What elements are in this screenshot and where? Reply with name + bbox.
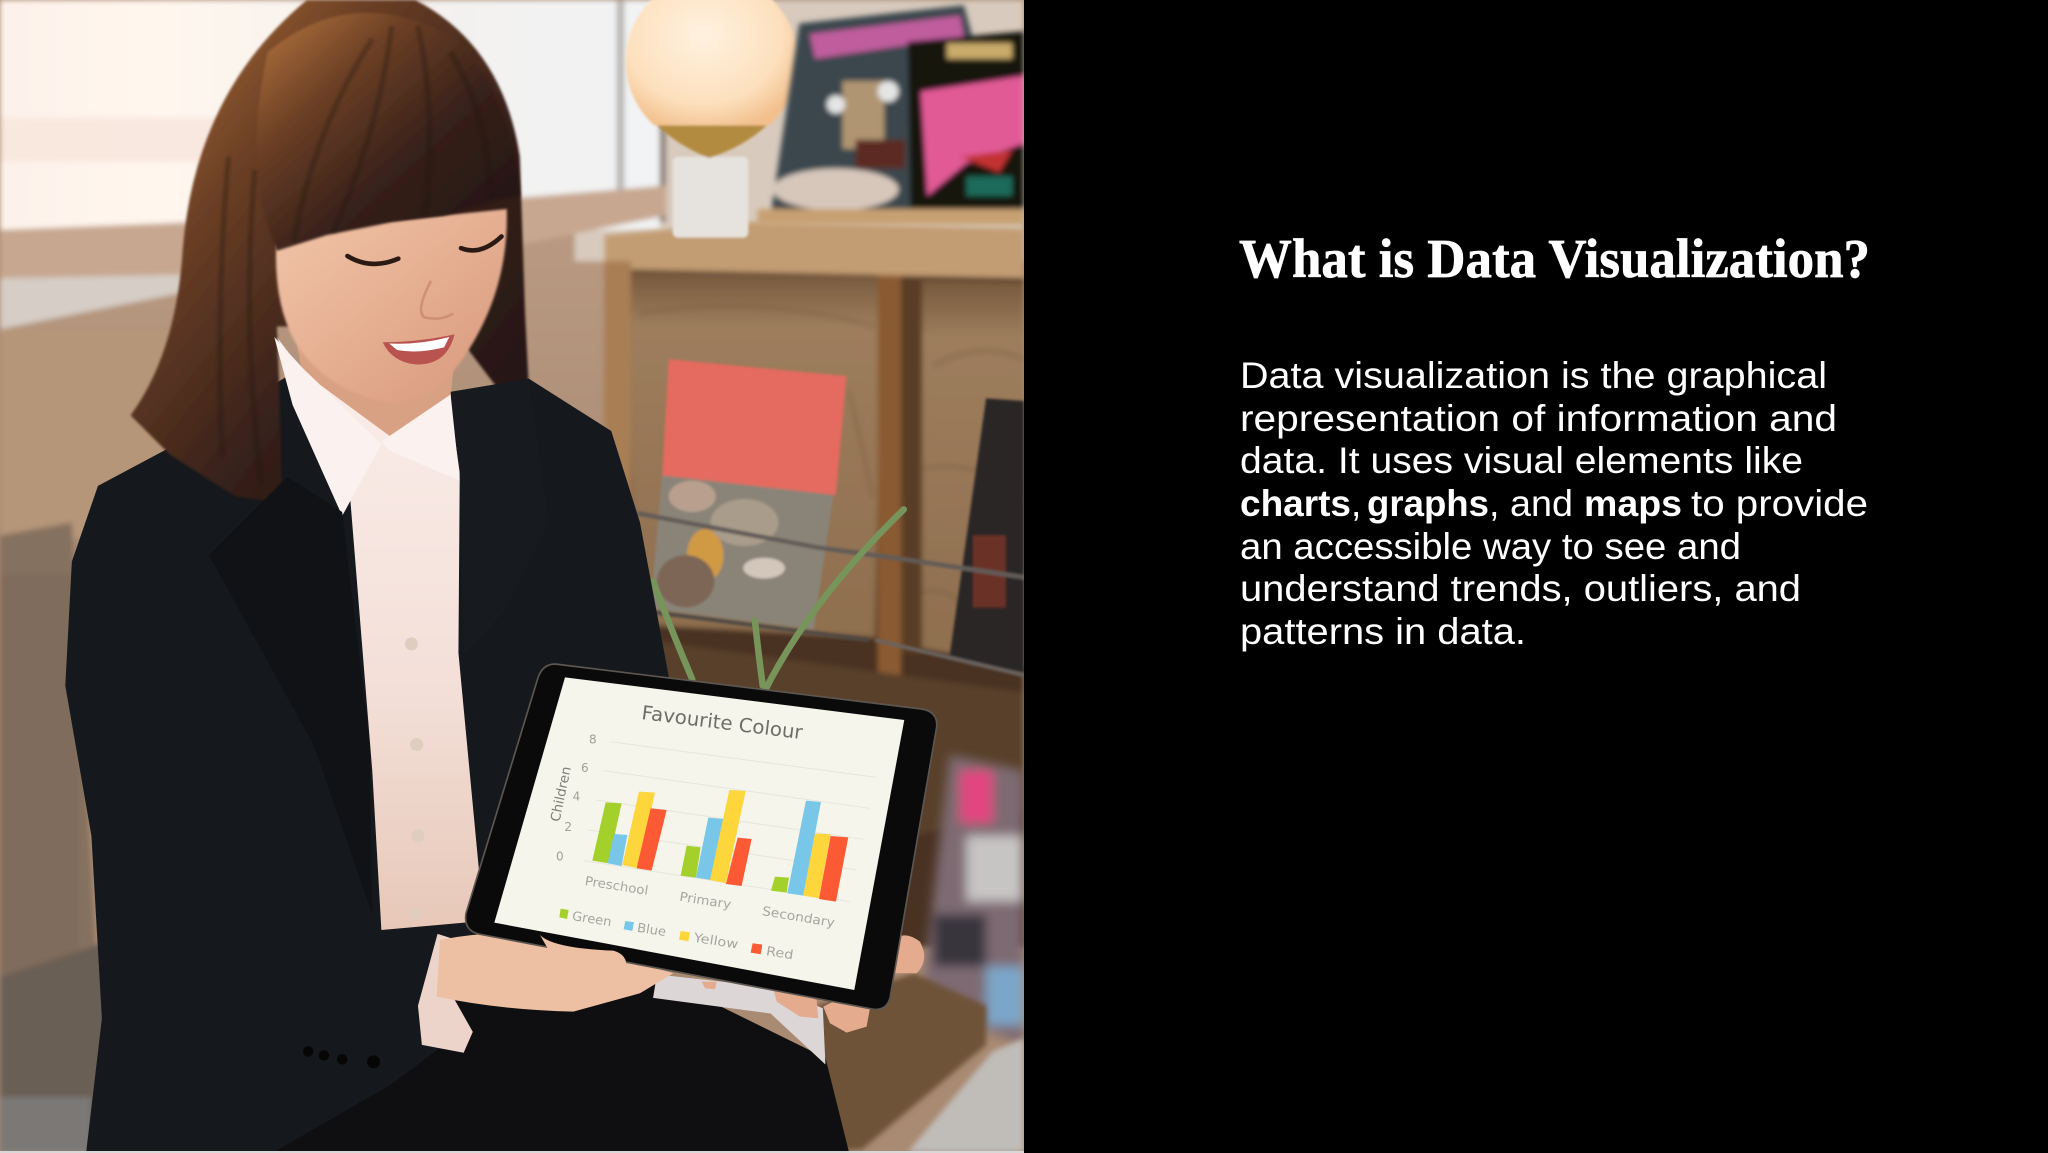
- wooden shelf: [605, 222, 1024, 947]
- title: What is Data Visualization?: [1239, 228, 1870, 289]
- bottom photo edge: [0, 1151, 1024, 1153]
- left hand behind tablet: [437, 933, 673, 1012]
- primary bars: [681, 790, 752, 886]
- hands and tablet, in tablet coordinates: [437, 664, 937, 1033]
- category labels: Primary: [679, 889, 733, 912]
- person: smile: [383, 334, 455, 364]
- body text block: representation of information and: [1240, 398, 1837, 439]
- body text block: understand trends, outliers, and: [1240, 568, 1801, 609]
- colourful magazine stack: [921, 755, 1024, 1045]
- right hand fingers behind tablet: [702, 935, 924, 1033]
- plant leaves: [653, 509, 904, 692]
- body text block: an accessible way to see and: [1240, 526, 1741, 567]
- chart title: Favourite Colour: [640, 701, 804, 744]
- body text block: patterns in data.: [1240, 611, 1526, 652]
- shelf magazines and books: [637, 359, 1024, 675]
- shirt tail under tablet: [653, 974, 825, 1064]
- side table and floor: [816, 973, 1024, 1152]
- body text block: , and: [1489, 483, 1573, 524]
- photo panel: woman presenting a bar chart on a tablet: [0, 0, 1024, 1153]
- person: nose: [421, 281, 453, 319]
- sleeve buttons: [303, 1046, 380, 1068]
- left thumb over tablet: [540, 935, 626, 993]
- body text block: to provide: [1691, 483, 1868, 524]
- body text block: charts: [1240, 483, 1351, 524]
- y axis numbers: 8: [589, 732, 597, 746]
- person: face: [276, 209, 507, 402]
- legend: Red: [765, 943, 795, 962]
- legend: Blue: [636, 920, 667, 939]
- person: hair back: [131, 0, 529, 503]
- secondary bars: [771, 801, 848, 902]
- tablet body: [466, 664, 937, 1009]
- y axis numbers: 6: [581, 761, 589, 775]
- legend: [559, 908, 795, 962]
- background room: [0, 0, 1024, 1152]
- body text block: graphs: [1367, 483, 1489, 524]
- person: shirt cuff: [418, 934, 473, 1053]
- body text block: [1240, 355, 1868, 652]
- y axis numbers: [556, 732, 597, 863]
- bar chart on screen: [549, 701, 877, 962]
- person: jacket: [65, 372, 669, 1152]
- tablet screen: [494, 677, 904, 990]
- y axis numbers: 4: [573, 790, 580, 804]
- panel: black text panel: [1024, 0, 2048, 1153]
- person: trousers: [248, 980, 849, 1152]
- y axis numbers: 2: [564, 820, 572, 834]
- person: collar: [274, 337, 460, 516]
- body text block: data. It uses visual elements like: [1240, 440, 1803, 481]
- category labels: Secondary: [761, 903, 836, 930]
- person: shirt: [277, 337, 481, 930]
- person: eyes: [347, 236, 502, 264]
- table lamp: [626, 0, 798, 238]
- top magazines: [758, 5, 1024, 225]
- person: hair strands: [220, 26, 490, 483]
- body text block: Data visualization is the graphical: [1240, 355, 1827, 396]
- legend: Green: [571, 908, 613, 929]
- gridlines: [583, 742, 877, 902]
- person: fringe: [257, 13, 520, 251]
- person: neck: [294, 327, 457, 447]
- preschool bars: [592, 792, 667, 871]
- legend: Yellow: [692, 930, 739, 952]
- body text block: ,: [1351, 483, 1361, 524]
- category labels: Preschool: [584, 873, 649, 898]
- category labels: [584, 873, 836, 930]
- person: lapels: [451, 379, 549, 653]
- y axis label: Children: [549, 765, 575, 823]
- person: shirt buttons: [405, 637, 424, 919]
- y axis numbers: 0: [556, 849, 564, 863]
- body text block: maps: [1584, 483, 1682, 524]
